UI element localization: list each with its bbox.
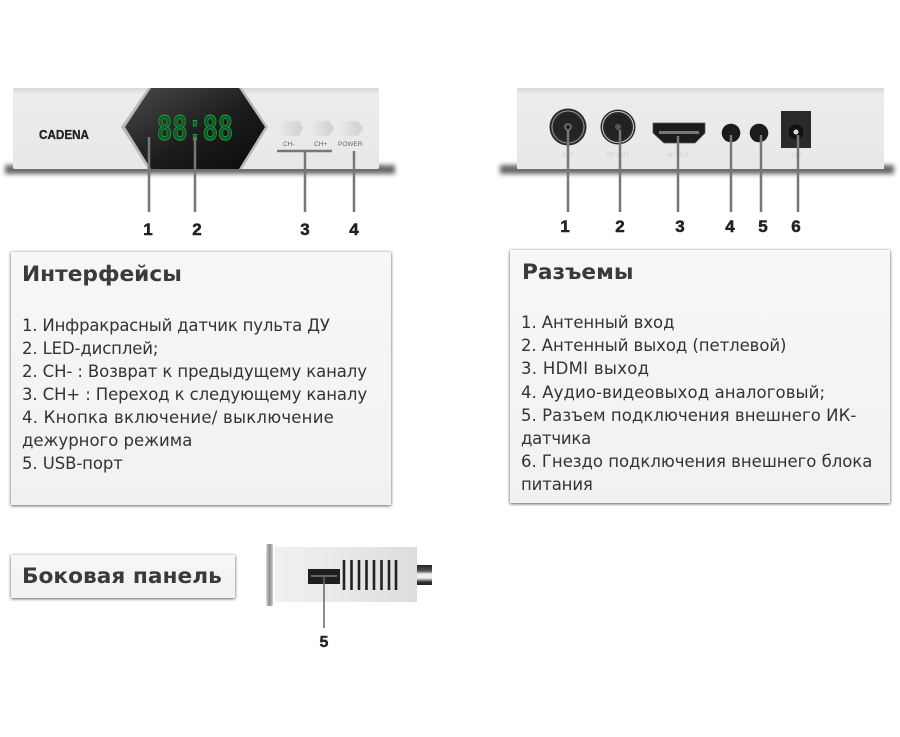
buttons bbox=[277, 121, 363, 136]
callout numbers: 4 bbox=[349, 220, 359, 239]
button labels: CH- bbox=[283, 141, 295, 148]
panel: side panel heading bbox=[11, 555, 235, 598]
faint port labels: ANT bbox=[562, 153, 574, 159]
list: interfaces: 4. Кнопка включение/ выключение bbox=[22, 408, 334, 427]
callout number: 5 bbox=[320, 634, 329, 651]
HDMI bbox=[653, 123, 705, 143]
LED clock: 88:88 bbox=[157, 110, 233, 152]
shadow under front device bbox=[5, 165, 395, 174]
faint port labels: HD OUT bbox=[666, 153, 690, 159]
faint port labels: 12V bbox=[791, 153, 801, 159]
callout numbers: 6 bbox=[791, 217, 801, 236]
callout numbers: 2 bbox=[615, 217, 625, 236]
IR jack bbox=[750, 124, 768, 142]
list: interfaces: 5. USB-порт bbox=[22, 454, 123, 473]
antenna out bbox=[600, 110, 636, 144]
list: connectors: датчика bbox=[521, 429, 591, 448]
heading: interfaces: Интерфейсы bbox=[22, 262, 182, 287]
list: connectors: 6. Гнездо подключения внешнего блока bbox=[521, 452, 872, 471]
callout lines bbox=[568, 130, 798, 212]
list: interfaces: 2. CH- : Возврат к предыдущему каналу bbox=[22, 362, 367, 381]
callout numbers: 2 bbox=[192, 220, 202, 239]
list: interfaces: 2. LED-дисплей; bbox=[22, 339, 158, 358]
side body bbox=[275, 547, 417, 602]
list: connectors: 1. Антенный вход bbox=[521, 313, 674, 332]
list: connectors bbox=[521, 313, 872, 494]
display hexagon bbox=[121, 88, 268, 169]
antenna stub bbox=[417, 565, 432, 585]
heading: side panel: Боковая панель bbox=[22, 564, 222, 589]
side bezel bbox=[266, 544, 273, 606]
list: connectors: 2. Антенный выход (петлевой) bbox=[521, 336, 786, 355]
antenna in bbox=[550, 108, 586, 146]
callout numbers: 1 bbox=[143, 220, 153, 239]
panel: interfaces bbox=[11, 252, 391, 505]
callout numbers: 5 bbox=[758, 217, 768, 236]
callout lines bbox=[149, 137, 354, 212]
list: connectors: питания bbox=[521, 475, 593, 494]
list: connectors: 4. Аудио-видеовыход аналоговый; bbox=[521, 383, 825, 402]
button labels: CH+ bbox=[314, 141, 327, 148]
callout numbers: 3 bbox=[300, 220, 310, 239]
list: connectors: 3. HDMI выход bbox=[521, 359, 649, 378]
side view of the receiver bbox=[266, 544, 432, 651]
list: interfaces: дежурного режима bbox=[22, 431, 192, 450]
AV jack bbox=[722, 124, 740, 142]
list: interfaces: 1. Инфракрасный датчик пульта ДУ bbox=[22, 316, 330, 335]
button labels: POWER bbox=[338, 141, 363, 148]
callout line bbox=[323, 576, 325, 628]
rear view of the receiver bbox=[500, 88, 894, 236]
rear body bbox=[517, 88, 884, 169]
callout numbers bbox=[560, 217, 801, 236]
power socket bbox=[781, 111, 811, 148]
logo: CADENA bbox=[39, 127, 90, 142]
shadow under rear device bbox=[500, 165, 894, 174]
faint port labels bbox=[562, 153, 801, 159]
callout numbers bbox=[143, 220, 359, 239]
panel: connectors bbox=[510, 250, 890, 503]
list: interfaces: 3. CH+ : Переход к следующему каналу bbox=[22, 385, 367, 404]
list: connectors: 5. Разъем подключения внешнего ИК- bbox=[521, 406, 856, 425]
USB port bbox=[308, 569, 340, 584]
vents bbox=[344, 560, 396, 590]
button labels bbox=[283, 141, 363, 148]
front body bbox=[13, 88, 379, 169]
heading: connectors: Разъемы bbox=[522, 260, 633, 285]
callout numbers: 3 bbox=[675, 217, 685, 236]
callout numbers: 4 bbox=[725, 217, 735, 236]
front view of the receiver bbox=[5, 88, 395, 239]
faint port labels: RF OUT bbox=[607, 153, 629, 159]
list: interfaces bbox=[22, 316, 367, 473]
callout numbers: 1 bbox=[560, 217, 570, 236]
